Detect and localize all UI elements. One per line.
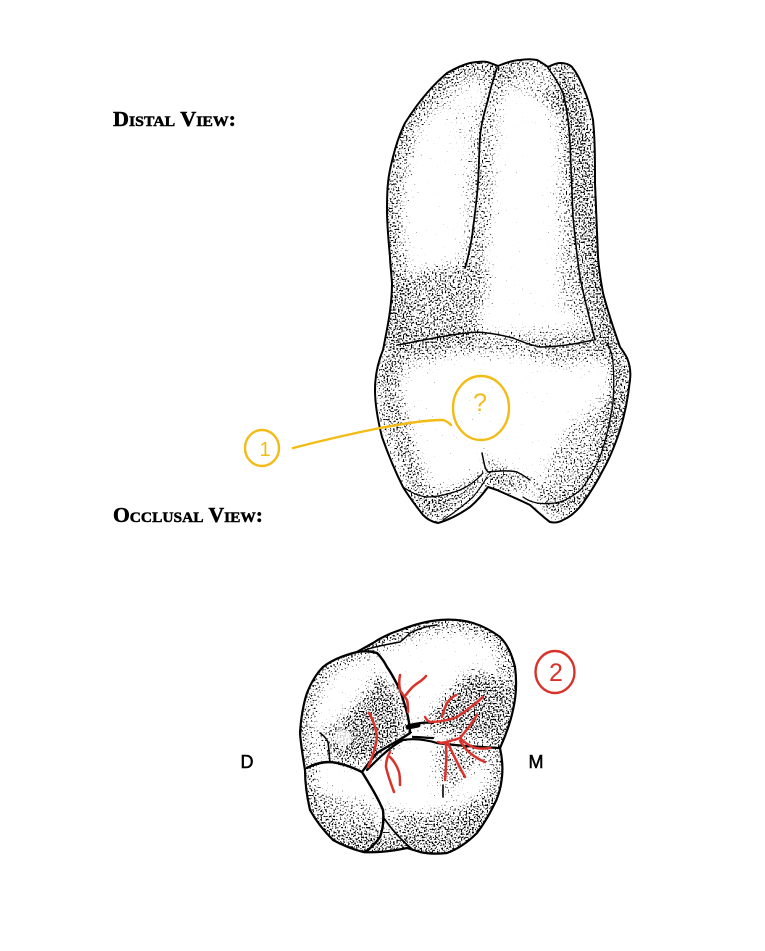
heading: distal view: Distal View: (113, 107, 236, 131)
leader line (293, 420, 451, 448)
question mark: ? (473, 389, 487, 417)
light spot in distal basin (334, 730, 352, 746)
yellow circle around question mark (453, 376, 509, 440)
annotation 2: red numbered circle (536, 651, 574, 693)
numbered circle 1 (245, 430, 279, 466)
label: D (distal): D (240, 752, 254, 772)
red fissure lines (368, 675, 490, 792)
stippled shading: occlusal view (300, 620, 514, 855)
annotation 1: yellow callout (245, 376, 509, 466)
stippled shading: distal view (372, 60, 635, 525)
annotation 2: red numbered circle: 2 (549, 659, 563, 687)
ink outline: distal view (375, 59, 630, 523)
heading: occlusal view: Occlusal View: (113, 503, 263, 527)
illustration: tooth distal view (372, 59, 635, 525)
ink outline: occlusal view (300, 620, 516, 854)
label: M (mesial): M (528, 752, 544, 772)
numbered circle 1: 1 (259, 439, 271, 461)
illustration: tooth occlusal view (300, 620, 516, 855)
